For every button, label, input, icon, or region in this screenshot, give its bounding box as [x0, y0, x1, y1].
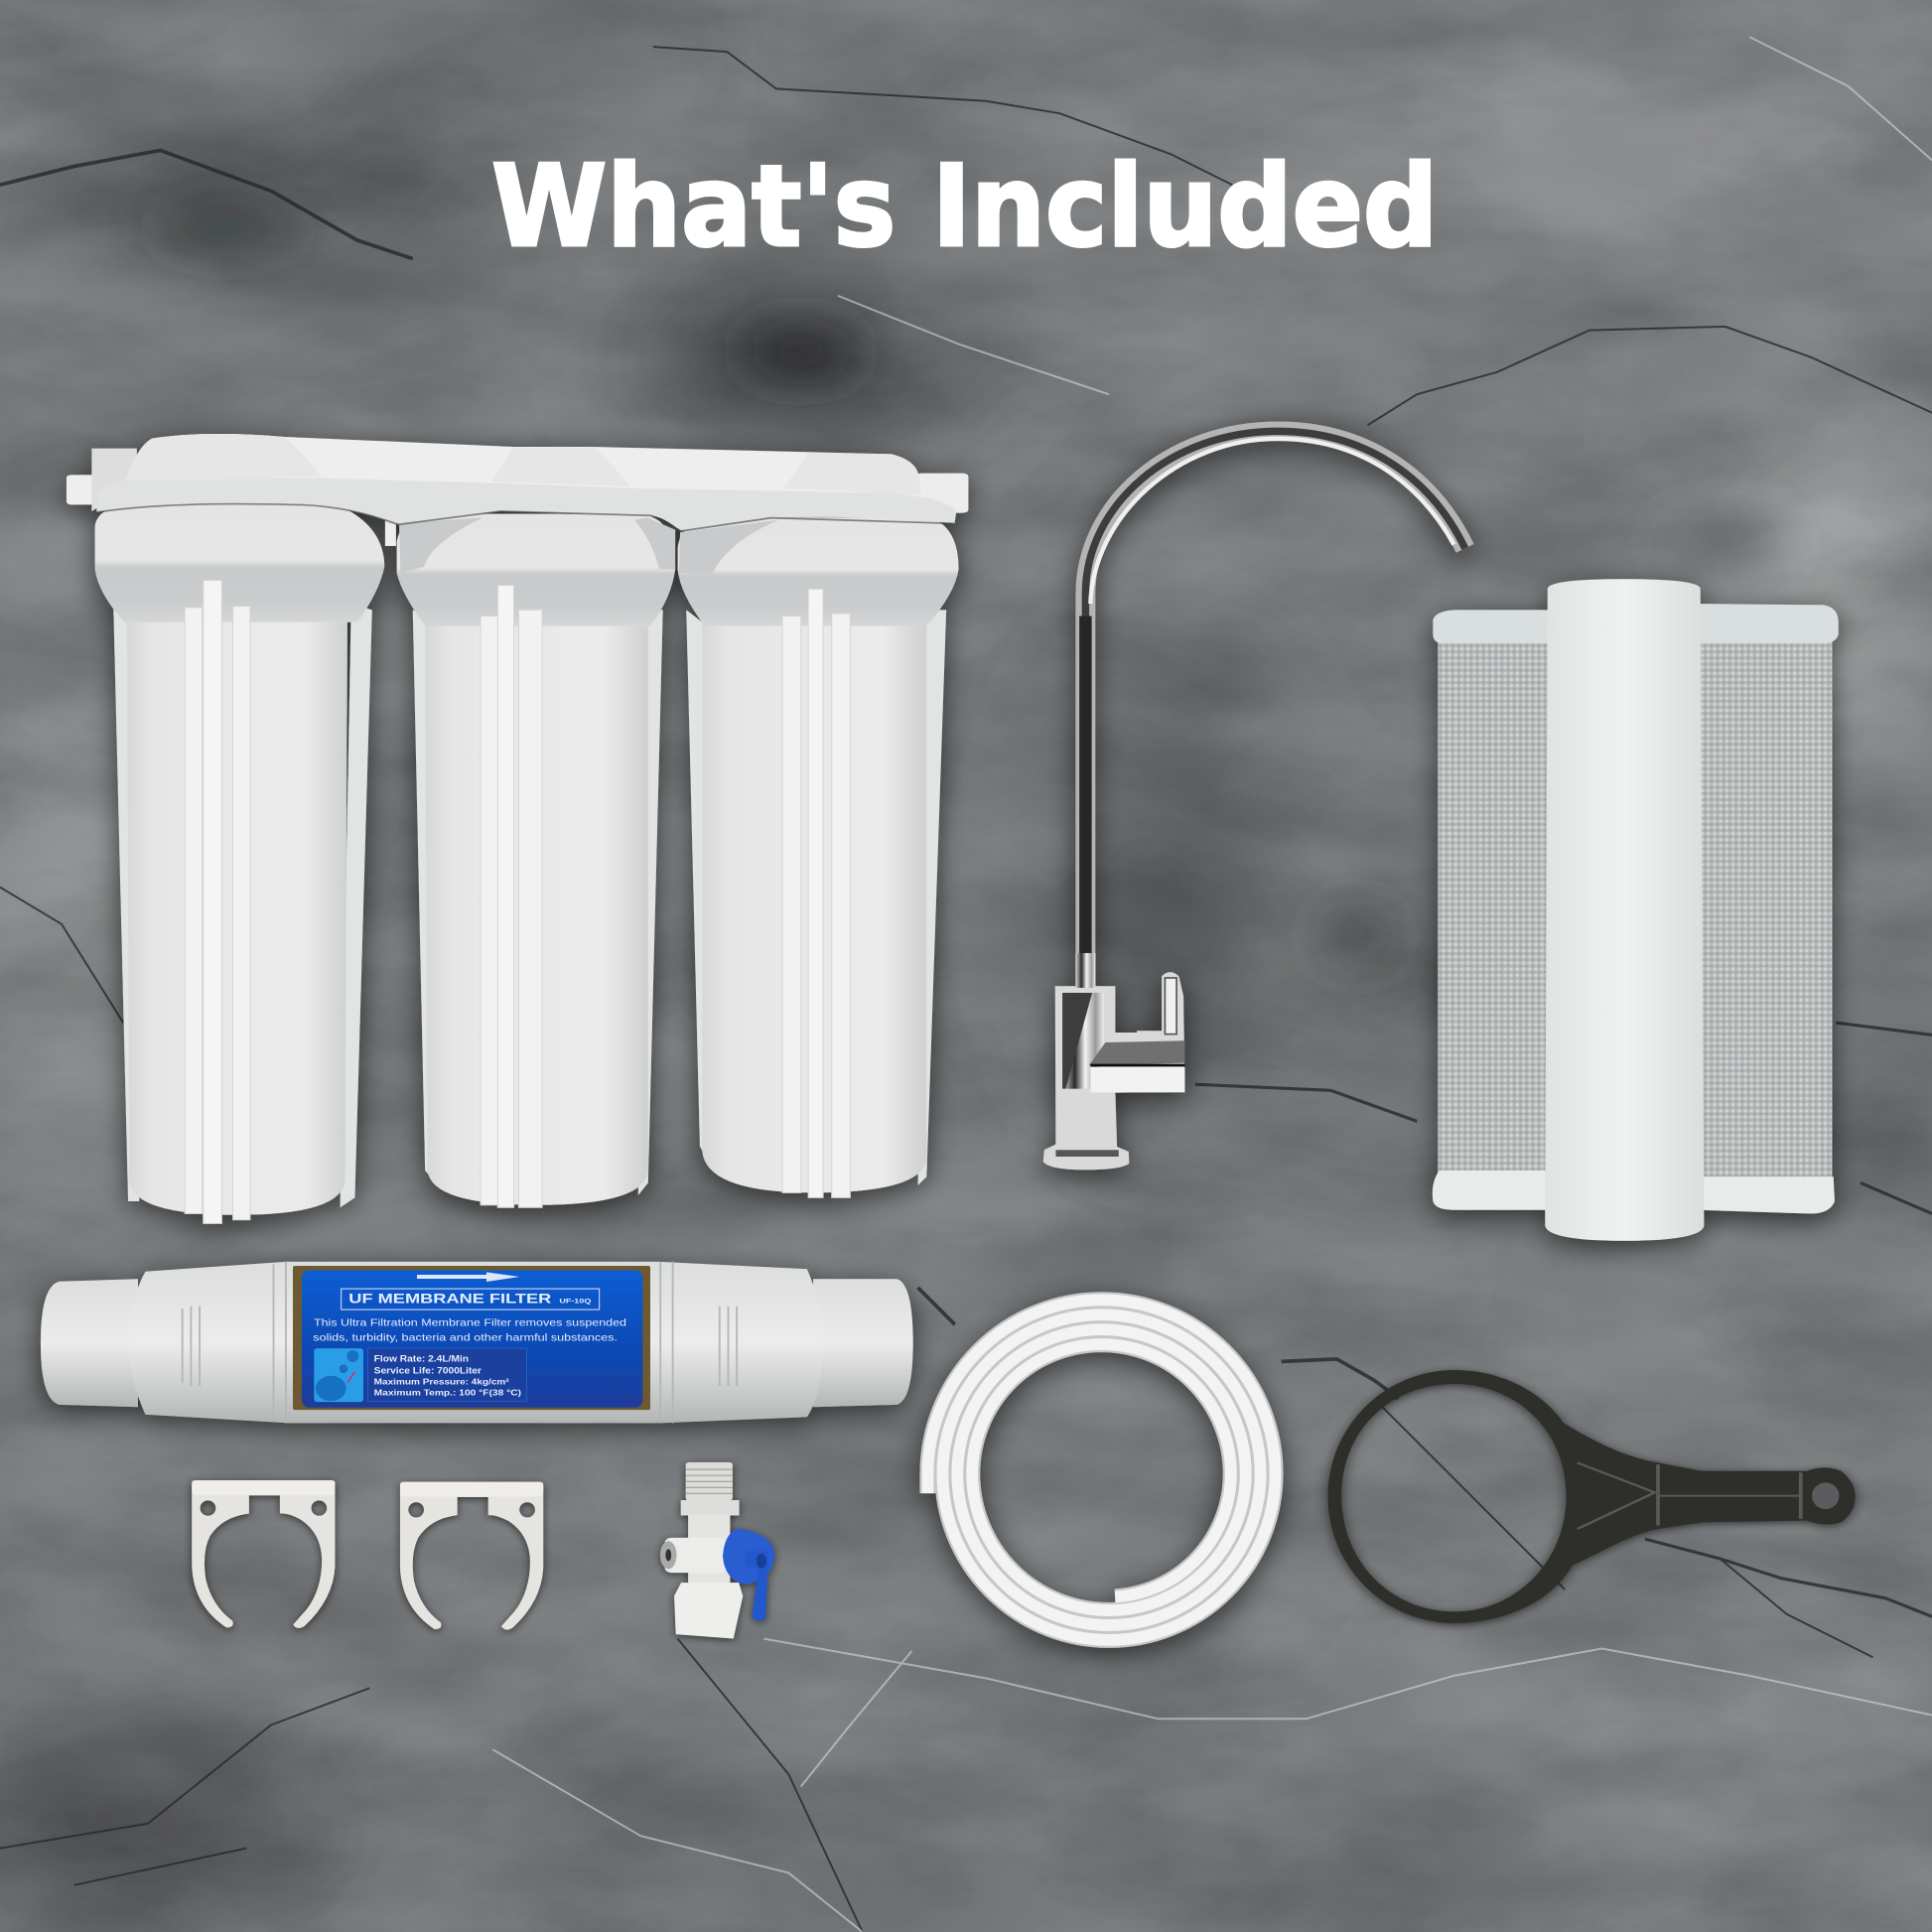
- carbon cartridge right: [1698, 604, 1839, 1213]
- label specifications: [368, 1348, 526, 1401]
- triple filter housing: [67, 434, 968, 1223]
- housing 2: [397, 514, 675, 1207]
- label specifications: Service Life: 7000Liter: [374, 1366, 483, 1376]
- title: What's Included: [491, 141, 1438, 272]
- filter wrench: [1328, 1370, 1856, 1623]
- label icon: [314, 1348, 363, 1402]
- carbon cartridge left: [1433, 610, 1552, 1210]
- faucet base: [1043, 953, 1184, 1170]
- UF membrane filter: [41, 1262, 913, 1423]
- replacement cartridges: [1433, 579, 1839, 1241]
- housing 3: [678, 517, 959, 1197]
- filter label: solids, turbidity, bacteria and other harmful substances.: [313, 1333, 618, 1344]
- spout: [1085, 431, 1465, 992]
- housing 1: [95, 502, 384, 1223]
- label specifications: Maximum Temp.: 100 °F(38 °C): [374, 1388, 521, 1397]
- mounting clip right: [400, 1482, 543, 1630]
- filter label: [293, 1266, 650, 1410]
- filter label: UF MEMBRANE FILTER: [348, 1292, 551, 1307]
- tubing coil: [928, 1300, 1276, 1640]
- mounting clip left: [192, 1480, 335, 1628]
- ball valve: [660, 1462, 774, 1638]
- label specifications: Flow Rate: 2.4L/Min: [374, 1354, 469, 1364]
- faucet: [1043, 431, 1465, 1170]
- filter label: UF-10Q: [559, 1299, 591, 1306]
- label specifications: Maximum Pressure: 4kg/cm²: [374, 1377, 509, 1386]
- sediment cartridge centre: [1545, 579, 1704, 1241]
- filter label: This Ultra Filtration Membrane Filter removes suspended: [314, 1318, 626, 1329]
- top bracket: [67, 434, 968, 546]
- filter barrel: [41, 1262, 913, 1423]
